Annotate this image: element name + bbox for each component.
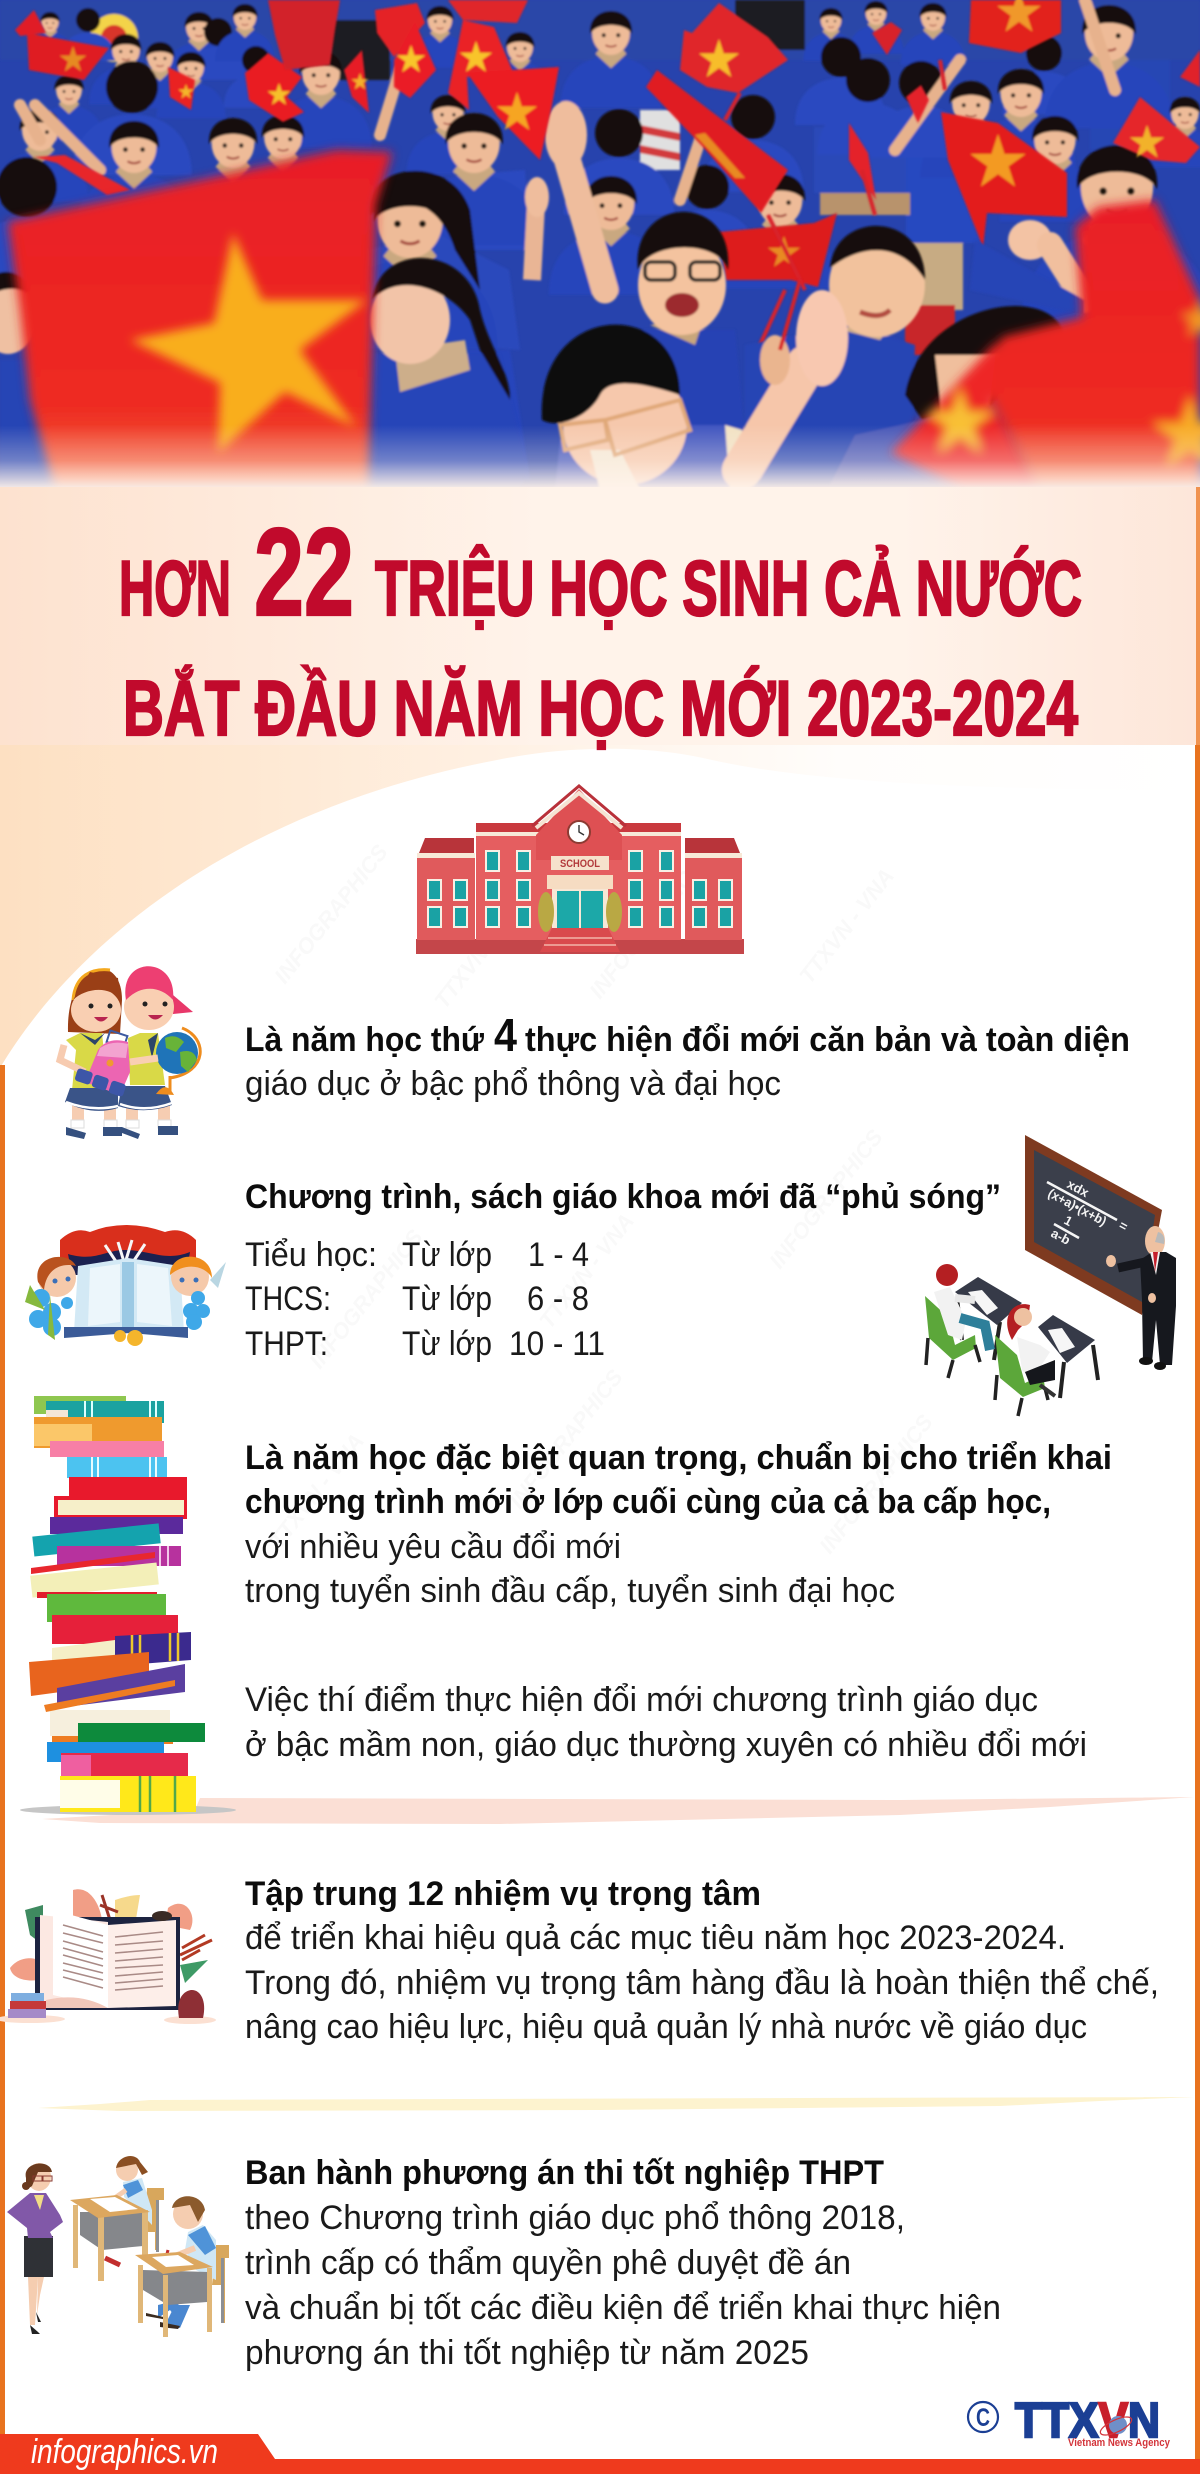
student one	[925, 1264, 1022, 1378]
blackboard: xdx	[1065, 1176, 1092, 1201]
icon: open book with two children	[25, 1225, 226, 1346]
faint watermarks: TTXVN - VNA	[794, 864, 899, 988]
title panel	[0, 487, 1200, 745]
site label: infographics.vn	[31, 2433, 218, 2471]
child right	[170, 1257, 226, 1296]
faint watermarks: INFOGRAPHICS	[814, 1410, 938, 1558]
blackboard	[1025, 1135, 1162, 1315]
text block: new curriculum and grades: 10 - 11	[509, 1325, 605, 1363]
logo: TTXVN: TTXVN	[1015, 2394, 1160, 2448]
text block: pilot programme	[245, 1681, 1087, 1764]
text block: new curriculum and grades: Từ lớp	[402, 1325, 492, 1363]
blackboard: (x+a)•(x+b)	[1046, 1185, 1109, 1229]
title: HƠN	[119, 544, 231, 632]
right waving hand	[1008, 220, 1052, 260]
backpack	[74, 1031, 130, 1097]
text block: new curriculum and grades: Từ lớp	[402, 1236, 492, 1274]
text block: graduation exam plan: theo Chương trình giáo dục phổ thông 2018,	[245, 2199, 905, 2237]
text block: graduation exam plan: và chuẩn bị tốt các điều kiện để triển khai thực hiện	[245, 2289, 1001, 2327]
text block: pilot programme: ở bậc mầm non, giáo dục thường xuyên có nhiều đổi mới	[245, 1726, 1087, 1764]
faint watermarks: INFOGRAPHICS	[504, 1365, 628, 1513]
text block: new curriculum and grades: Tiểu học:	[245, 1236, 377, 1274]
text block: new curriculum and grades: THCS:	[245, 1280, 331, 1318]
sign: SCHOOL	[560, 858, 600, 870]
faint watermarks: INFOGRAPHICS	[764, 1125, 888, 1273]
faint watermarks: INFOGRAPHICS	[304, 1225, 428, 1373]
text block: 4th year of reform: Là năm học thứ	[245, 1021, 484, 1059]
pupil one	[70, 2156, 164, 2281]
blackboard: 1	[1062, 1212, 1075, 1229]
text block: new curriculum and grades: Từ lớp	[402, 1280, 492, 1318]
text block: new curriculum and grades: 6 - 8	[527, 1280, 589, 1318]
text block: pilot programme: Việc thí điểm thực hiện đổi mới chương trình giáo dục	[245, 1681, 1038, 1719]
faint watermarks: INFOGRAPHICS	[584, 855, 708, 1003]
glasses boy	[640, 328, 746, 432]
crowd of pupils	[0, 0, 1200, 490]
text block: especially important year: với nhiều yêu cầu đổi mới	[245, 1528, 621, 1566]
foreground boy with glasses and raised arm	[558, 424, 728, 482]
student two	[995, 1304, 1098, 1416]
text block: 4th year of reform: thực hiện đổi mới căn bản và toàn diện	[525, 1021, 1130, 1059]
hero photo: crowd of pupils waving flags	[0, 0, 1200, 490]
text block: especially important year: chương trình mới ở lớp cuối cùng của cả ba cấp học,	[245, 1483, 1051, 1521]
right boy	[745, 325, 915, 480]
text block: 4th year of reform: 4	[494, 1009, 517, 1061]
text block: 12 key tasks: để triển khai hiệu quả các mục tiêu năm học 2023-2024.	[245, 1919, 1066, 1957]
text block: new curriculum and grades: Chương trình, sách giáo khoa mới đã “phủ sóng”	[245, 1178, 1001, 1216]
pupil two	[135, 2196, 229, 2337]
teacher	[1106, 1226, 1176, 1370]
girl front left	[374, 352, 511, 439]
text block: new curriculum and grades: 1 - 4	[528, 1236, 589, 1274]
text block: new curriculum and grades	[245, 1178, 1001, 1363]
text block: graduation exam plan: phương án thi tốt nghiệp từ năm 2025	[245, 2334, 809, 2372]
text block: graduation exam plan: Ban hành phương án thi tốt nghiệp THPT	[245, 2154, 884, 2192]
child at left edge	[0, 360, 55, 490]
text block: especially important year: Là năm học đặc biệt quan trọng, chuẩn bị cho triển khai	[245, 1439, 1112, 1477]
faint watermarks: TTXVN - VNA	[429, 889, 534, 1013]
title	[119, 504, 1082, 752]
side borders	[0, 745, 1200, 2459]
footer band	[0, 2433, 1200, 2474]
text block: new curriculum and grades: THPT:	[245, 1325, 328, 1363]
text block: 12 key tasks: nâng cao hiệu lực, hiệu quả quản lý nhà nước về giáo dục	[245, 2008, 1087, 2046]
text block: 12 key tasks: Trong đó, nhiệm vụ trọng tâm hàng đầu là hoàn thiện thể chế,	[245, 1964, 1159, 2002]
teacher	[7, 2163, 63, 2334]
child left	[37, 1257, 76, 1297]
text block: 12 key tasks	[245, 1875, 1159, 2046]
right partly hidden boy	[904, 304, 1062, 420]
blackboard: a-b	[1049, 1225, 1073, 1248]
arms raised	[12, 0, 1123, 208]
text block: graduation exam plan	[245, 2154, 1001, 2372]
title: 22	[254, 504, 354, 642]
icon: open book with leaves	[0, 1889, 216, 2024]
sign	[551, 856, 609, 870]
icon: school building	[416, 786, 744, 954]
faint watermarks: TTXVN - VNA	[534, 1209, 639, 1333]
logo: TTXVN: Vietnam News Agency	[1068, 2437, 1171, 2449]
big flag left	[8, 150, 392, 490]
text block: 12 key tasks: Tập trung 12 nhiệm vụ trọng tâm	[245, 1875, 761, 1913]
faint watermarks	[264, 840, 938, 1558]
blackboard: =	[1117, 1217, 1131, 1234]
girl right	[118, 966, 193, 1110]
text block: 4th year of reform	[245, 1009, 1130, 1103]
text block: graduation exam plan: trình cấp có thẩm quyền phê duyệt đề án	[245, 2244, 851, 2282]
text block: especially important year	[245, 1439, 1112, 1610]
logo: TTXVN: C	[976, 2404, 990, 2432]
big flag right	[891, 200, 1200, 490]
yellow brush-stroke divider	[38, 2097, 1194, 2111]
girl left	[60, 969, 122, 1111]
faint watermarks: TTXVN - VNA	[264, 1429, 369, 1553]
icon: two girls with backpack and globe	[60, 966, 200, 1139]
globe	[130, 1028, 200, 1095]
faint watermarks: INFOGRAPHICS	[269, 840, 393, 988]
text block: 4th year of reform: giáo dục ở bậc phổ thông và đại học	[245, 1065, 781, 1103]
small flags	[15, 0, 1200, 345]
text block: especially important year: trong tuyển sinh đầu cấp, tuyển sinh đại học	[245, 1572, 895, 1610]
flowers	[25, 1285, 210, 1340]
peach arc background	[0, 745, 1200, 1070]
legs and shoes	[66, 1105, 178, 1139]
icon: stack of books	[20, 1396, 236, 1815]
icon: exam room with teacher and two pupils	[7, 2156, 229, 2337]
icon: teacher at blackboard with two students	[925, 1135, 1176, 1416]
foreground pupils	[370, 212, 1085, 490]
pink brush-stroke divider	[42, 1797, 1194, 1824]
